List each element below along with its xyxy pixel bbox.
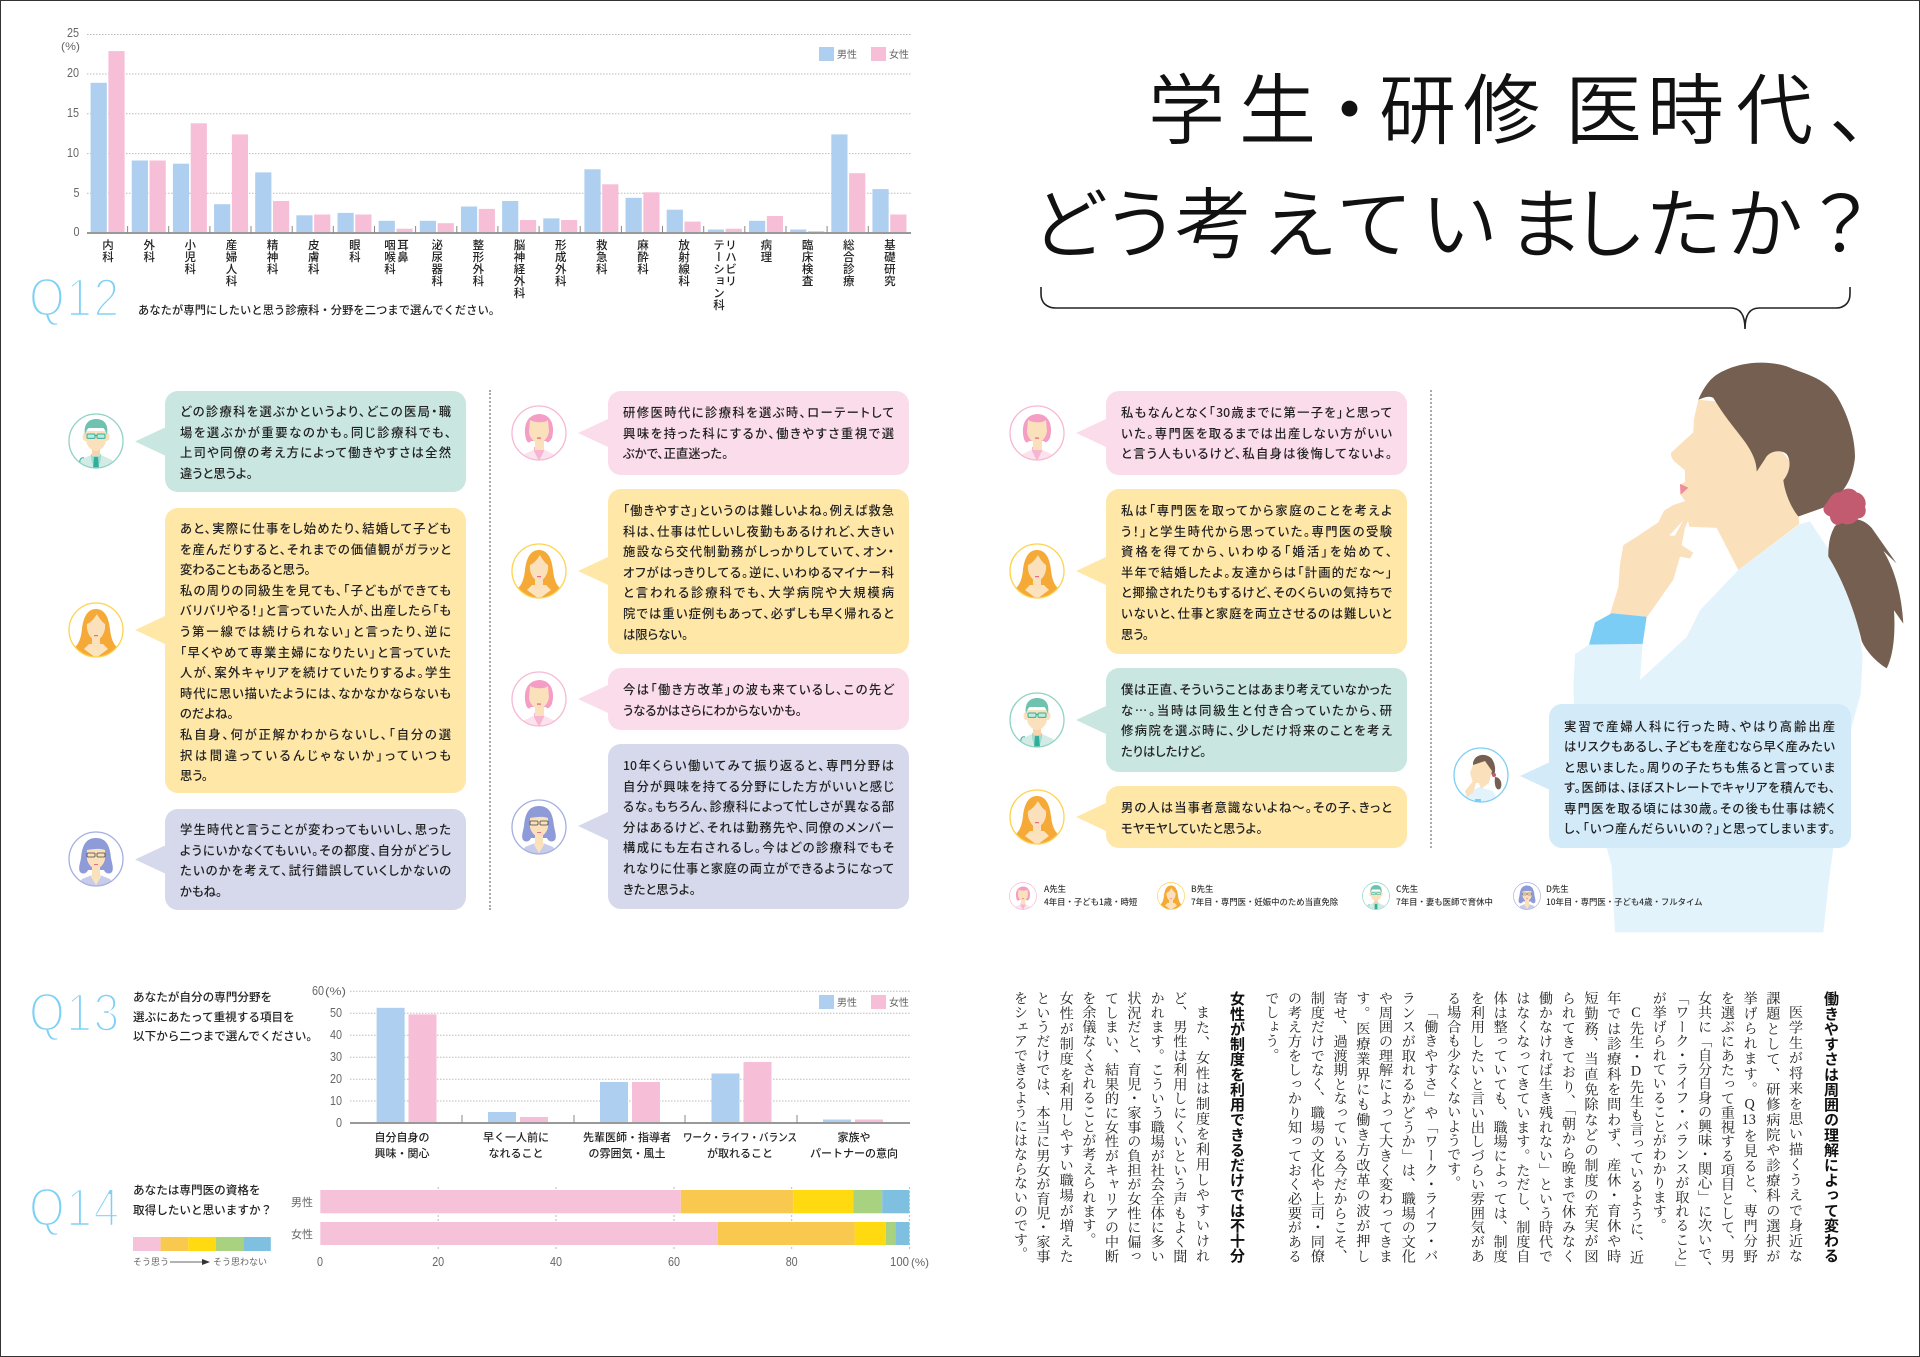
bubble D: るな。もちろん、診療科によって忙しさが異なる部: [623, 797, 894, 815]
text block: first section: す。医療業界にも働き方改革の波が押し: [1354, 991, 1370, 1263]
hand: [1610, 501, 1693, 617]
title: 生: [1239, 50, 1316, 161]
profile D: [1513, 882, 1703, 910]
bubble: student: 専門医を取る頃には30歳。その後も仕事は続く: [1564, 799, 1835, 817]
profile A: [1009, 882, 1137, 910]
text block: second section: 状況だと、育児・家事の負担が女性に偏っ: [1125, 991, 1141, 1263]
bubble: student: す。医師は、ほぼストレートでキャリアを積んでも、: [1564, 778, 1835, 796]
male bars: [91, 83, 889, 233]
title: 、: [1829, 50, 1906, 161]
bubble A: [1076, 391, 1407, 475]
bubble B: う第一線では続けられない」と言ったり、逆に: [180, 622, 451, 640]
title: ど: [1031, 164, 1108, 275]
bubble B: [1076, 489, 1407, 654]
text block: first section: や周囲の理解によって大きく変わってきま: [1377, 991, 1393, 1263]
text block: first section: 年では診療科を問わず、産休・育休や時: [1605, 991, 1621, 1263]
text block: first section: を選ぶにあたって重視する項目として、男: [1719, 991, 1735, 1263]
profile B: B先生: [1191, 883, 1213, 895]
text block: first section: を利用したいと言い出しづらい雰囲気があ: [1469, 991, 1485, 1263]
category labels: 皮膚科: [307, 239, 320, 275]
text block: first section: 女共に「自分自身の興味・関心」に次いで、: [1696, 991, 1712, 1275]
text block: first section: の考え方をしっかり知っておく必要がある: [1286, 991, 1302, 1263]
avatar A: [511, 405, 567, 461]
text block: first section: はなくなってきています。ただし、制度自: [1514, 991, 1530, 1263]
bubble B: 人が、案外キャリアを続けていたりするよ。学生: [180, 663, 451, 681]
category labels: 眼科: [348, 239, 361, 263]
bubble B: 私は「専門医を取ってから家庭のことを考えよ: [1121, 501, 1392, 519]
baseline and ticks: [87, 226, 911, 233]
bubble D: [135, 809, 466, 910]
grid and axis values: 10: [330, 1093, 342, 1108]
bubble D: きたと思うよ。: [623, 880, 696, 898]
bubble: student: [1520, 704, 1851, 848]
profile A: A先生: [1044, 883, 1066, 895]
baseline and ticks: [350, 1115, 910, 1123]
panel: student speech bubble: [1453, 704, 1851, 848]
category labels: パートナーの意向: [810, 1146, 898, 1160]
category labels: 整形外科: [471, 238, 484, 287]
legend: doctor profiles: [1009, 882, 1703, 910]
category labels: ワーク・ライフ・バランス: [683, 1131, 797, 1144]
title: ？: [1802, 164, 1879, 275]
category labels: 咽喉科: [383, 239, 396, 275]
panel: speech bubbles, right column: [1009, 391, 1407, 848]
grid and axis values: [312, 983, 910, 1130]
panel: speech bubbles, middle column: [511, 391, 909, 909]
category labels: 基礎研究: [883, 238, 896, 287]
x axis values: 20: [432, 1254, 444, 1269]
category labels: 小児科: [183, 239, 196, 275]
bubble D: 自分が興味を持てる分野にした方がいいと感じ: [623, 777, 894, 795]
bubble A: いた。専門医を取るまでは出産しない方がいい: [1121, 424, 1392, 442]
text: Q13 question: 以下から二つまで選んでください。: [133, 1028, 318, 1044]
bubble A: 私もなんとなく「30歳までに第一子を」と思って: [1121, 403, 1392, 421]
text block: first section: 働かなければ生き残れない」という時代で: [1537, 991, 1553, 1263]
bubble A: と言う人もいるけど、私自身は後悔してないよ。: [1121, 444, 1392, 462]
category labels: 脳神経外科: [512, 239, 525, 299]
x axis values: 40: [550, 1254, 562, 1269]
ponytail: [1828, 519, 1903, 668]
title: 時: [1647, 50, 1724, 161]
text block: first section: られてきており、「朝から晩まで休みなく: [1560, 991, 1576, 1263]
title: た: [1645, 164, 1722, 275]
text: Q14 question: あなたは専門医の資格を: [133, 1182, 261, 1198]
category labels: 臨床検査: [801, 239, 813, 287]
bubble D: 構成にも左右されるし。今はどの診療科でもそ: [623, 838, 894, 856]
bubble: student: と思いました。周りの子たちも焦ると言っていま: [1564, 758, 1835, 776]
title: 医: [1565, 50, 1642, 161]
legend: male / female: 男性: [837, 48, 857, 61]
bubble C: [1076, 668, 1407, 772]
category labels: 内科: [101, 238, 114, 263]
bubble B: あと、実際に仕事をし始めたり、結婚して子ども: [180, 519, 451, 537]
bubble B: 思う。: [1121, 625, 1149, 643]
bubble B: は限らない。: [623, 625, 688, 643]
avatar D: [511, 799, 567, 855]
bubble A: うなるかはさらにわからないかも。: [623, 701, 802, 719]
heading: Q12: Q12: [29, 268, 121, 328]
grid and axis values: 60: [312, 983, 324, 998]
bubble C: 修病院を選ぶ時に、少しだけ将来のことを考え: [1121, 721, 1392, 739]
grid lines and axis values: 15: [67, 105, 79, 120]
text block: second section: てしまい、結果的に女性がキャリアの中断: [1103, 991, 1119, 1263]
x axis values: 60: [668, 1254, 680, 1269]
x axis values: 80: [786, 1254, 798, 1269]
bubble C: 場を選ぶかが重要なのかも。同じ診療科でも、: [180, 423, 451, 441]
avatar B: [1009, 789, 1065, 845]
bubble C: 僕は正直、そういうことはあまり考えていなかった: [1121, 680, 1392, 698]
hair: [1698, 363, 1855, 516]
text block: second section: 女性が制度を利用しやすい職場が増えた: [1058, 991, 1074, 1263]
text block: second section: ど、男性は利用しにくいという声もよく聞: [1171, 991, 1187, 1263]
profile B: 7年目・専門医・妊娠中のため当直免除: [1191, 896, 1338, 908]
bubble B: 半年で結婚したよ。友達からは「計画的だな〜」: [1121, 563, 1392, 581]
title: て: [1336, 164, 1413, 275]
title: い: [1421, 164, 1498, 275]
legend: agreement scale: そう思う: [133, 1257, 169, 1267]
category labels: 麻酔科: [636, 239, 649, 275]
heading: workability: 働きやすさは周囲の理解によって変わる: [1822, 991, 1839, 1263]
bubble B: と揶揄されたりもするけど、そのくらいの気持ちで: [1121, 583, 1392, 601]
text: Q13 question: [133, 989, 318, 1044]
lab coat: [1573, 521, 1863, 932]
grid lines and axis values: [61, 25, 911, 239]
bubble D: れなりに仕事と家庭の両立ができるようになって: [623, 859, 894, 877]
row labels: [291, 1195, 313, 1241]
bubble B: いないと、仕事と家庭を両立させるのは難しいと: [1121, 604, 1392, 622]
illustration: thinking woman doctor: [1573, 362, 1904, 932]
text block: first section: が挙げられていることがわかります。: [1651, 991, 1667, 1232]
profile D: D先生: [1546, 883, 1569, 895]
x axis values: (%): [911, 1257, 929, 1269]
category labels: 耳鼻: [396, 239, 409, 263]
text block: first section: ランスが取れるかどうか」は、職場の文化: [1400, 991, 1416, 1263]
grid and axis values: (%): [325, 986, 346, 998]
x axis values: [317, 1254, 929, 1269]
category labels: 早く一人前に: [483, 1130, 549, 1144]
bubble B: 男の人は当事者意識ないよね〜。その子、きっと: [1121, 798, 1392, 816]
text block: first section: でしょう。: [1263, 991, 1279, 1062]
text block: first section: 寄せ、過渡期となっている今だからこそ、: [1332, 991, 1348, 1263]
category labels: の雰囲気・風土: [588, 1146, 666, 1160]
bubble C: たりはしたけど。: [1121, 742, 1206, 760]
avatar D: [68, 831, 124, 887]
avatar B: [68, 602, 124, 658]
title: 代: [1736, 50, 1813, 161]
bubble B: オフがはっきりしてる。逆に、いわゆるマイナー科: [623, 563, 894, 581]
bubble B: モヤモヤしていたと思うよ。: [1121, 819, 1262, 837]
bubble B: 思う。: [180, 766, 208, 784]
female bars: [408, 1014, 883, 1123]
profile C: [1362, 882, 1493, 910]
profile C: 7年目・妻も医師で育休中: [1396, 896, 1493, 908]
panel: Q14 stacked bar chart: [291, 1187, 929, 1269]
category labels: 総合診療: [842, 238, 854, 287]
bubble: student: 実習で産婦人科に行った時、やはり高齢出産: [1564, 716, 1835, 734]
male stacked bar: [320, 1190, 909, 1213]
bubble D: [578, 744, 909, 909]
legend: male / female: [819, 47, 909, 61]
row labels: 男性: [291, 1195, 313, 1209]
text block: second section: というだけでは、本当に男女が育児・家事: [1034, 991, 1050, 1263]
bubble B: バリバリやる！」と言っていた人が、出産したら「も: [180, 601, 451, 619]
category labels: 自分自身の: [374, 1130, 430, 1144]
text: Q13 question: 選ぶにあたって重視する項目を: [133, 1009, 295, 1025]
bubble B: 私自身、何が正解かわからないし、「自分の選: [180, 725, 451, 743]
bubble B: 私の周りの同級生を見ても、「子どもができても: [180, 581, 451, 599]
bubble B: [135, 508, 466, 793]
legend: agreement scale: そう思わない: [213, 1257, 267, 1267]
title: 修: [1463, 50, 1540, 161]
bubble B: 時代に思い描いたようには、なかなかならないも: [180, 684, 451, 702]
bubble D: たいのかを考えて、試行錯誤していくしかないの: [180, 861, 451, 879]
divider: [1430, 390, 1432, 848]
bubble B: のだよね。: [180, 704, 234, 722]
bubble: student: し、「いつ産んだらいいの？」と思ってしまいます。: [1564, 819, 1835, 837]
bubble C: 違うと思うよ。: [180, 464, 253, 482]
bubble C: 上司や同僚の考え方によって働きやすさは全然: [180, 443, 451, 461]
avatar C: [1009, 692, 1065, 748]
bubble D: 学生時代と言うことが変わってもいいし、思った: [180, 820, 451, 838]
bubble B: う！」と学生時代から思っていた。専門医の受験: [1121, 522, 1392, 540]
bubble B: [1076, 786, 1407, 848]
category labels: 病理: [759, 239, 772, 263]
grid and axis values: 40: [330, 1027, 342, 1042]
bubble D: 分はあるけど、それは勤務先や、同僚のメンバー: [623, 818, 894, 836]
text block: first section: 課題として、研修病院や診療科の選択が: [1764, 991, 1780, 1263]
text block: first section: る場合も少なくないようです。: [1445, 991, 1461, 1190]
vertical grid: [438, 1187, 909, 1250]
title: 学: [1148, 50, 1225, 161]
bubble A: [578, 668, 909, 730]
grid and axis values: 50: [330, 1005, 342, 1020]
category labels: リハビリ: [724, 239, 737, 287]
category labels: なれること: [488, 1147, 544, 1160]
panel: speech bubbles, left column: [68, 391, 466, 910]
avatar: student: [1453, 747, 1509, 803]
category labels: テーション科: [712, 239, 725, 311]
text block: first section: 「働きやすさ」や「ワーク・ライフ・バ: [1422, 1005, 1438, 1263]
text block: first section: C 先生・ D 先生も言っているように、近: [1628, 1005, 1644, 1265]
text block: first section: 体は整っていても、職場によっては、制度: [1492, 991, 1508, 1263]
text block: second section: を余儀なくされることが考えられます。: [1080, 991, 1096, 1247]
gap between fingers: [1669, 520, 1683, 536]
category labels: 放射線科: [677, 238, 690, 287]
grid lines and axis values: 10: [67, 145, 79, 160]
bubble B: 資格を得てから、いわゆる「婚活」を始めて、: [1121, 542, 1392, 560]
text: Q14 question: 取得したいと思いますか？: [133, 1202, 272, 1218]
bubble C: な…。当時は同級生と付き合っていたから、研: [1121, 701, 1392, 719]
bubble D: 10年くらい働いてみて振り返ると、専門分野は: [623, 756, 894, 774]
category labels: 救急科: [595, 238, 608, 275]
category labels: 産婦人科: [224, 238, 237, 287]
bubble A: 今は「働き方改革」の波も来ているし、この先ど: [623, 680, 894, 698]
skin: [1671, 400, 1799, 570]
grid lines and axis values: (%): [61, 41, 80, 53]
legend: male / female: 女性: [889, 996, 909, 1009]
grid lines and axis values: 20: [67, 65, 79, 80]
text: Q14 question: [133, 1182, 272, 1218]
category labels: が取れること: [707, 1146, 773, 1160]
legend: male / female: 女性: [889, 48, 909, 61]
text block: first section: 短勤務、当直免除などの制度の充実が図: [1582, 991, 1598, 1263]
lips: [1680, 484, 1688, 495]
bubble B: と言われる診療科でも、大学病院や大規模病: [623, 583, 894, 601]
title: 考: [1175, 164, 1252, 275]
category labels: 形成外科: [554, 239, 566, 287]
bubble B: [578, 489, 909, 654]
profile B: [1157, 882, 1338, 910]
bubble A: [578, 391, 909, 475]
panel: Q13 bar chart: [312, 983, 910, 1160]
bubble B: を産んだりすると、それまでの価値観がガラッと: [180, 540, 451, 558]
bubble B: 院では重い症例もあって、必ずしも早く帰れると: [623, 604, 894, 622]
grid and axis values: 30: [330, 1049, 342, 1064]
bubble B: 「早くやめて専業主婦になりたい」と言っていた: [180, 643, 451, 661]
bubble C: どの診療科を選ぶかというより、どこの医局・職: [180, 402, 451, 420]
title: う: [1102, 164, 1179, 275]
cuff: [1589, 613, 1647, 645]
text block: first section: 医学生が将来を思い描くうえで身近な: [1787, 1005, 1803, 1263]
bubble B: 科は、仕事は忙しいし夜勤もあるけれど、大きい: [623, 522, 894, 540]
bubble A: 研修医時代に診療科を選ぶ時、ローテートして: [623, 403, 894, 421]
bubble D: かもね。: [180, 882, 222, 900]
avatar B: [1009, 543, 1065, 599]
grid lines and axis values: 0: [74, 224, 80, 239]
female bars: [108, 51, 906, 233]
scrunchie: [1823, 489, 1866, 525]
heading: not enough: 女性が制度を利用できるだけでは不十分: [1228, 991, 1245, 1263]
grid lines and axis values: 25: [67, 25, 79, 40]
profile D: 10年目・専門医・子ども4歳・フルタイム: [1546, 896, 1703, 908]
bubble C: [135, 391, 466, 492]
category labels: 家族や: [838, 1130, 870, 1144]
bubble A: ぶかで、正直迷った。: [623, 444, 728, 462]
divider: [489, 390, 491, 910]
bubble B: 択は間違っているんじゃないか」っていつも: [180, 746, 451, 764]
bubble A: 興味を持った科にするか、働きやすさ重視で選: [623, 424, 894, 442]
category labels: [101, 238, 896, 311]
title: し: [1570, 164, 1647, 275]
male bars: [377, 1008, 851, 1123]
avatar C: [68, 413, 124, 469]
legend: male / female: [819, 995, 909, 1009]
profile A: 4年目・子ども1歳・時短: [1044, 896, 1137, 908]
avatar A: [511, 671, 567, 727]
title: ・: [1311, 50, 1388, 161]
article: vertical body text: [1012, 991, 1839, 1275]
grid and axis values: 0: [336, 1115, 342, 1130]
avatar A: [1009, 405, 1065, 461]
text block: second section: [1012, 991, 1210, 1263]
category labels: 興味・関心: [374, 1146, 430, 1160]
x axis values: 100: [890, 1254, 909, 1269]
panel: Q12 specialty bar chart: [61, 25, 911, 311]
bubble: student: はリスクもあるし、子どもを産むなら早く産みたい: [1564, 737, 1835, 755]
text block: first section: 挙げられます。 Q 13 を見ると、専門分野: [1742, 991, 1758, 1263]
x axis values: 0: [317, 1254, 323, 1269]
category labels: 精神科: [266, 238, 278, 275]
heading: Q13: Q13: [29, 983, 121, 1043]
brace under title: [1040, 287, 1851, 329]
bubble D: ようにいかなくてもいい。その都度、自分がどうし: [180, 841, 451, 859]
profile C: C先生: [1396, 883, 1418, 895]
title: ま: [1507, 164, 1584, 275]
legend: male / female: 男性: [837, 996, 857, 1009]
category labels: 先輩医師・指導者: [583, 1130, 671, 1144]
bubble B: 変わることもあると思う。: [180, 560, 311, 578]
heading: Q14: Q14: [29, 1178, 121, 1238]
avatar B: [511, 543, 567, 599]
text block: second section: をシェアできるようにはならないのです。: [1012, 991, 1028, 1261]
text block: first section: [1263, 991, 1803, 1275]
text block: second section: また、女性は制度を利用しやすいけれ: [1194, 1005, 1210, 1263]
text block: second section: かれます。こういう職場が社会全体に多い: [1149, 991, 1165, 1263]
category labels: 外科: [142, 238, 155, 263]
title: 研: [1379, 50, 1456, 161]
text: Q12 question: あなたが専門にしたいと思う診療科・分野を二つまで選んでください。: [138, 302, 500, 318]
female stacked bar: [320, 1222, 909, 1245]
text: Q13 question: あなたが自分の専門分野を: [133, 989, 272, 1005]
text block: first section: 制度だけでなく、職場の文化や上司・同僚: [1309, 991, 1325, 1263]
category labels: 泌尿器科: [430, 238, 443, 287]
grid lines and axis values: 5: [74, 185, 80, 200]
grid and axis values: 20: [330, 1071, 342, 1086]
legend: agreement scale: [133, 1237, 271, 1267]
bubble B: 「働きやすさ」というのは難しいよね。例えば救急: [623, 501, 894, 519]
bubble B: 施設なら交代制勤務がしっかりしていて、オン・: [623, 542, 894, 560]
text block: first section: 「ワーク・ライフ・バランスが取れること」: [1673, 991, 1689, 1275]
title: [1031, 50, 1906, 275]
row labels: 女性: [291, 1227, 313, 1241]
title: え: [1261, 164, 1338, 275]
category labels: [374, 1130, 898, 1160]
title: か: [1726, 164, 1803, 275]
